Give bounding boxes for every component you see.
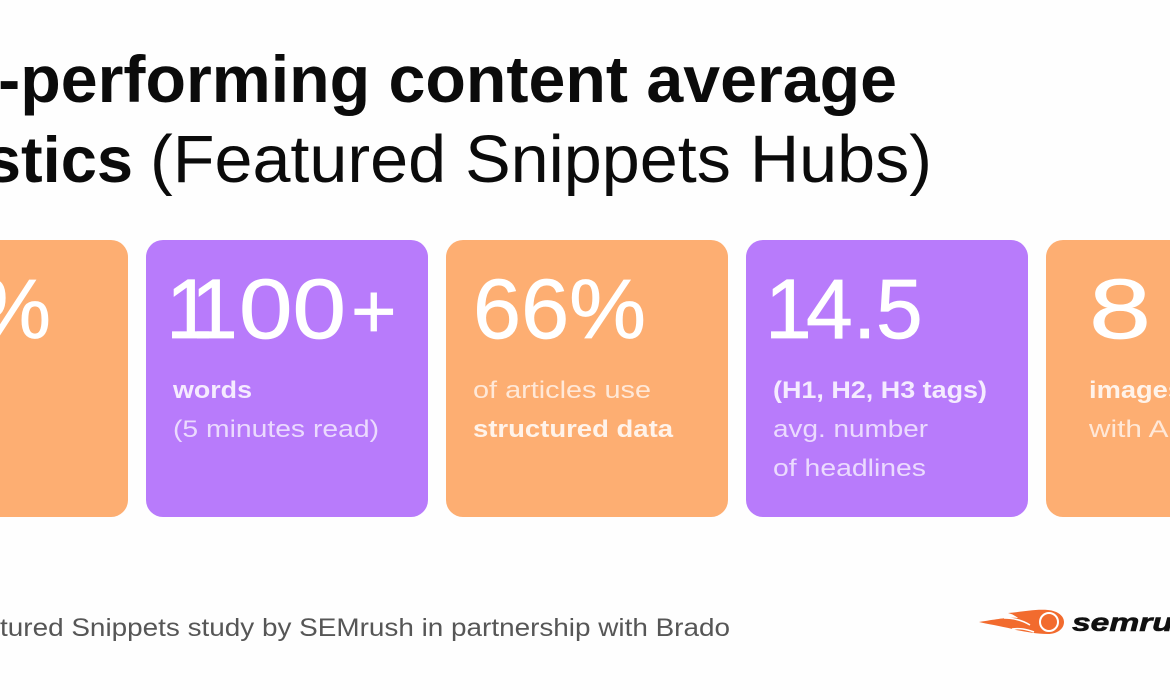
panel: cut-off percentage stat — [0, 240, 128, 517]
panel: headlines: 14.5 — [765, 262, 923, 356]
panel: headlines: of headlines — [773, 455, 926, 482]
big number: 1100+: 11 — [166, 262, 238, 356]
big number: 1100+ — [166, 262, 397, 356]
panel: word count: (5 minutes read) — [173, 416, 379, 443]
panel: headlines — [746, 240, 1028, 517]
icon: SEMrush fireball logo — [979, 610, 1064, 634]
big number: 1100+: + — [351, 267, 397, 355]
panel: images: images — [1089, 377, 1170, 404]
panel: structured data: 66% — [473, 262, 646, 356]
panel: word count — [146, 240, 428, 517]
panel: structured data — [446, 240, 728, 517]
panel: structured data: structured data — [473, 416, 674, 443]
panel: images — [1046, 240, 1170, 517]
title — [0, 43, 932, 197]
panel: word count: words — [172, 377, 252, 404]
panel: structured data: of articles use — [473, 377, 651, 404]
title: (Featured Snippets Hubs) — [150, 122, 932, 197]
panel: headlines: (H1, H2, H3 tags) — [773, 377, 987, 404]
panel: images: 8 — [1089, 262, 1151, 356]
big number: 1100+: 00 — [239, 262, 346, 356]
panel: headlines: avg. number — [773, 416, 928, 443]
